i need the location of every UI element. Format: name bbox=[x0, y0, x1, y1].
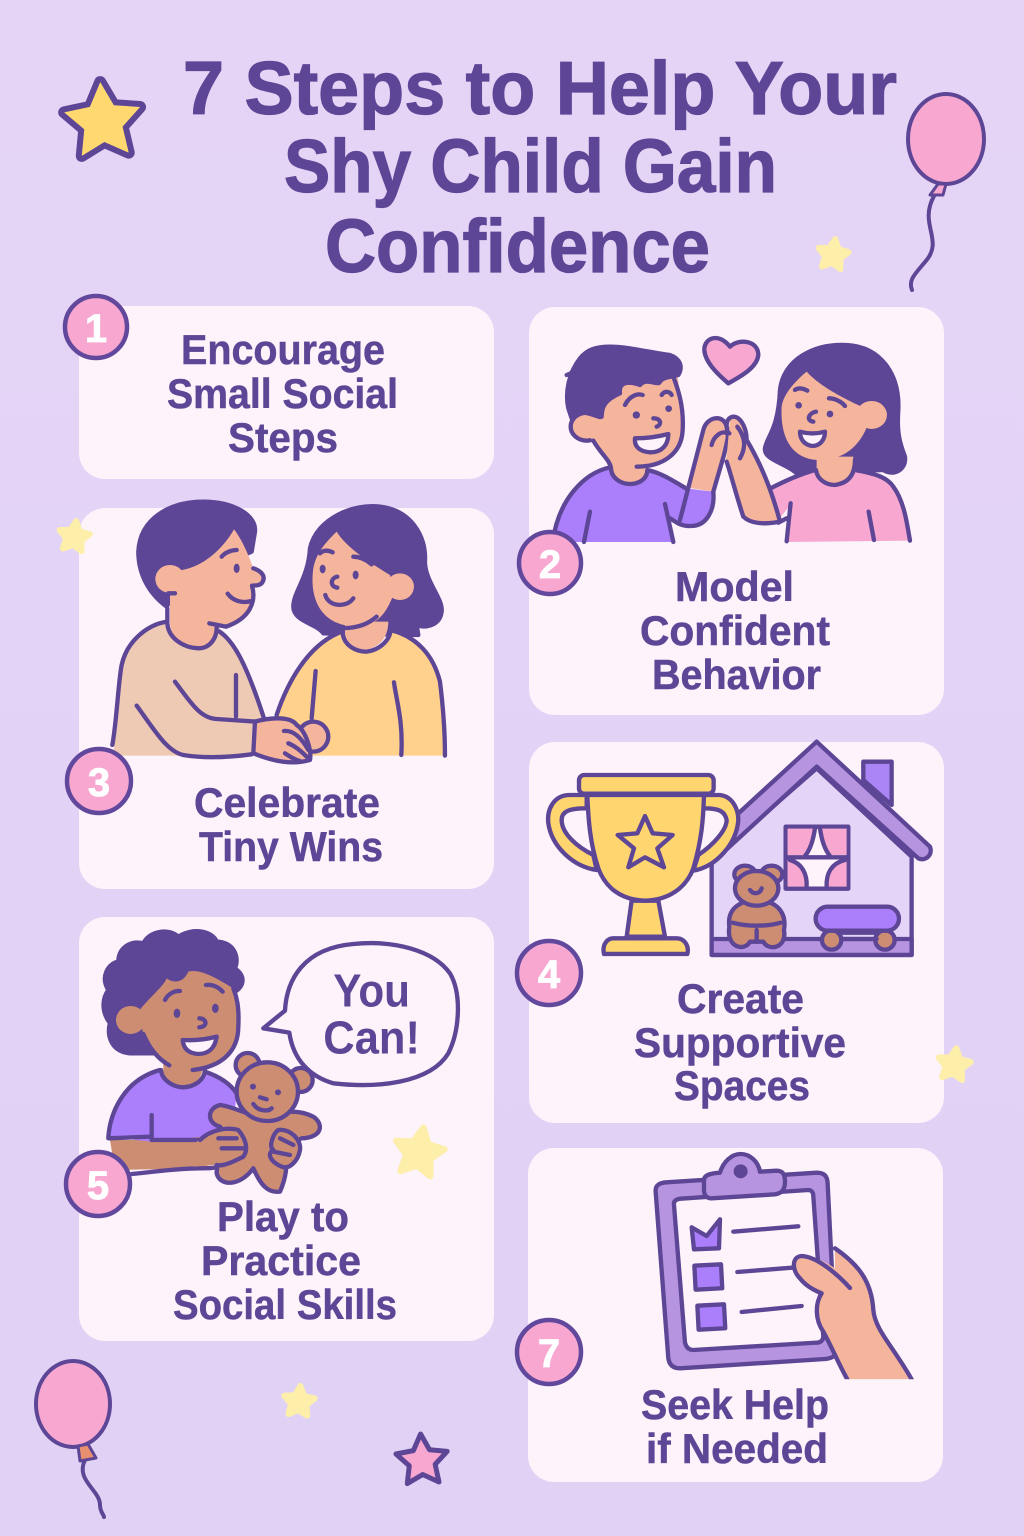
title: Confidence bbox=[325, 204, 710, 288]
badge 1: 1 bbox=[85, 307, 107, 351]
icon: pink star bottom bbox=[395, 1433, 449, 1484]
badge 5 bbox=[66, 1152, 130, 1216]
heading: model confident behavior: Confident bbox=[640, 607, 830, 654]
house bbox=[712, 742, 931, 955]
hands bbox=[298, 722, 328, 752]
man bbox=[112, 502, 264, 757]
title: 7 Steps to Help Your bbox=[183, 46, 897, 130]
badge 2: 2 bbox=[539, 543, 561, 587]
speech bubble: You bbox=[333, 965, 410, 1017]
teddy bear bbox=[210, 1053, 320, 1192]
panel: step 4 bbox=[517, 742, 944, 1123]
panel: step 3 bbox=[67, 502, 494, 889]
girl bbox=[725, 345, 910, 542]
icon: pale star left bbox=[57, 519, 91, 552]
heading: create supportive spaces: Create bbox=[677, 975, 804, 1022]
heading: celebrate tiny wins bbox=[194, 779, 383, 870]
panel: step 7 bbox=[517, 1148, 943, 1482]
hands bbox=[193, 1129, 246, 1167]
badge 4: 4 bbox=[538, 953, 561, 997]
badge 5: 5 bbox=[87, 1164, 109, 1208]
badge 3: 3 bbox=[88, 761, 110, 805]
heading: play to practice social skills: Social Skills bbox=[173, 1281, 397, 1328]
heart bbox=[704, 338, 758, 383]
badge 7: 7 bbox=[538, 1332, 560, 1376]
heading: play to practice social skills bbox=[173, 1193, 397, 1328]
bear bbox=[729, 866, 784, 947]
panel: step 5 bbox=[66, 917, 494, 1341]
decoration star in step 5 bbox=[391, 1123, 448, 1178]
heading: encourage small social steps: Small Social bbox=[167, 370, 398, 417]
girl bbox=[273, 506, 445, 756]
badge 7 bbox=[517, 1320, 581, 1384]
heading: play to practice social skills: Practice bbox=[201, 1237, 361, 1284]
icon: pink balloon bottom left bbox=[36, 1361, 110, 1517]
title: Shy Child Gain bbox=[284, 124, 777, 208]
badge 3 bbox=[67, 749, 131, 813]
heading: seek help if needed bbox=[641, 1381, 829, 1472]
heading: celebrate tiny wins: Celebrate bbox=[194, 779, 380, 826]
heading: create supportive spaces bbox=[634, 975, 846, 1109]
illustration: child with teddy bear and speech bubble bbox=[104, 931, 458, 1192]
child bbox=[104, 931, 243, 1174]
panel: step 2 bbox=[519, 307, 944, 715]
badge 4 bbox=[517, 941, 581, 1005]
panel: step 1 bbox=[65, 296, 494, 479]
clipboard bbox=[656, 1154, 836, 1368]
illustration: boy and girl high five bbox=[553, 338, 910, 542]
heading: encourage small social steps bbox=[167, 326, 398, 461]
heading: model confident behavior bbox=[640, 563, 830, 698]
illustration: parent and child holding hands bbox=[112, 502, 445, 762]
heading: encourage small social steps: Encourage bbox=[181, 326, 385, 373]
heading: celebrate tiny wins: Tiny Wins bbox=[199, 823, 383, 870]
heading: model confident behavior: Behavior bbox=[652, 651, 821, 698]
sofa bbox=[816, 907, 899, 950]
hand bbox=[794, 1248, 912, 1379]
badge 2 bbox=[519, 532, 581, 594]
heading: play to practice social skills: Play to bbox=[217, 1193, 349, 1240]
icon: pale star bottom bbox=[283, 1385, 316, 1416]
illustration: trophy and house bbox=[548, 742, 931, 955]
trophy bbox=[548, 775, 738, 954]
heading: create supportive spaces: Spaces bbox=[674, 1062, 810, 1109]
heading: encourage small social steps: Steps bbox=[228, 414, 338, 461]
heading: seek help if needed: if Needed bbox=[646, 1425, 828, 1472]
icon: pale star right bbox=[936, 1046, 972, 1081]
icon: pink balloon top right bbox=[908, 94, 984, 290]
illustration: clipboard checklist and hand bbox=[656, 1154, 912, 1379]
icon: pale star near balloon bbox=[816, 237, 850, 270]
title bbox=[183, 46, 897, 288]
speech bubble: Can! bbox=[323, 1011, 420, 1063]
badge 1 bbox=[65, 296, 127, 358]
heading: create supportive spaces: Supportive bbox=[634, 1019, 846, 1066]
speech bubble bbox=[263, 943, 458, 1085]
icon: yellow star top left bbox=[62, 79, 143, 157]
boy bbox=[553, 347, 728, 542]
heading: model confident behavior: Model bbox=[675, 563, 794, 610]
heading: seek help if needed: Seek Help bbox=[641, 1381, 829, 1428]
